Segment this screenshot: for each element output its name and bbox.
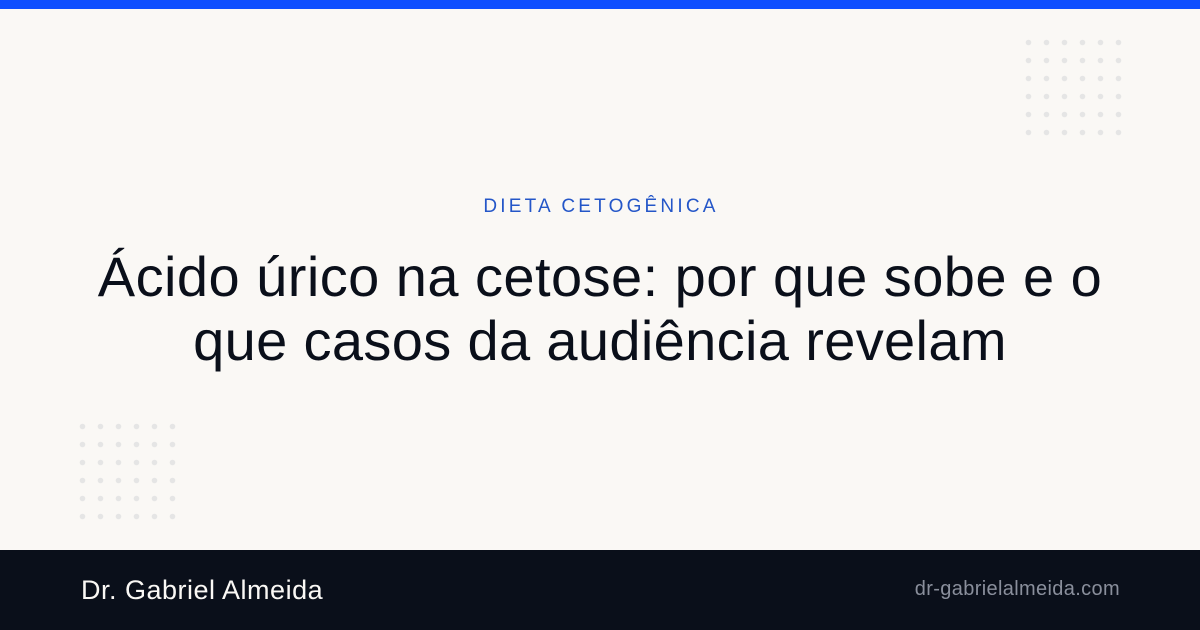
title: [98, 245, 1102, 372]
dot pattern: top right: [1026, 40, 1122, 136]
author name: Dr. Gabriel Almeida: [81, 575, 323, 605]
category label: DIETA CETOGÊNICA: [483, 196, 719, 217]
title: Ácido úrico na cetose: por que sobe e o: [98, 245, 1102, 308]
website url: dr-gabrielalmeida.com: [915, 578, 1120, 600]
title: que casos da audiência revelam: [193, 309, 1007, 372]
top accent bar: [0, 0, 1200, 9]
dot pattern: bottom left: [80, 424, 176, 520]
footer bar: [0, 550, 1200, 630]
